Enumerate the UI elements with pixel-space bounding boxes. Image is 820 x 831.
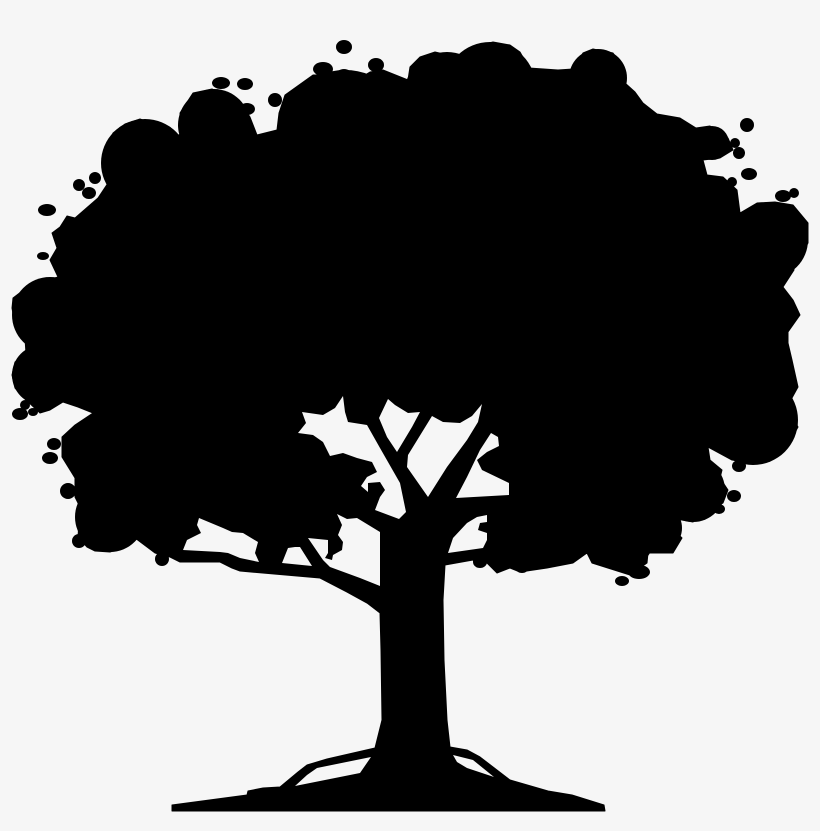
gaps between branches <box>183 396 509 586</box>
leaf clusters <box>12 40 799 586</box>
gaps under roots <box>295 755 494 786</box>
canopy edge bumps <box>12 42 808 570</box>
